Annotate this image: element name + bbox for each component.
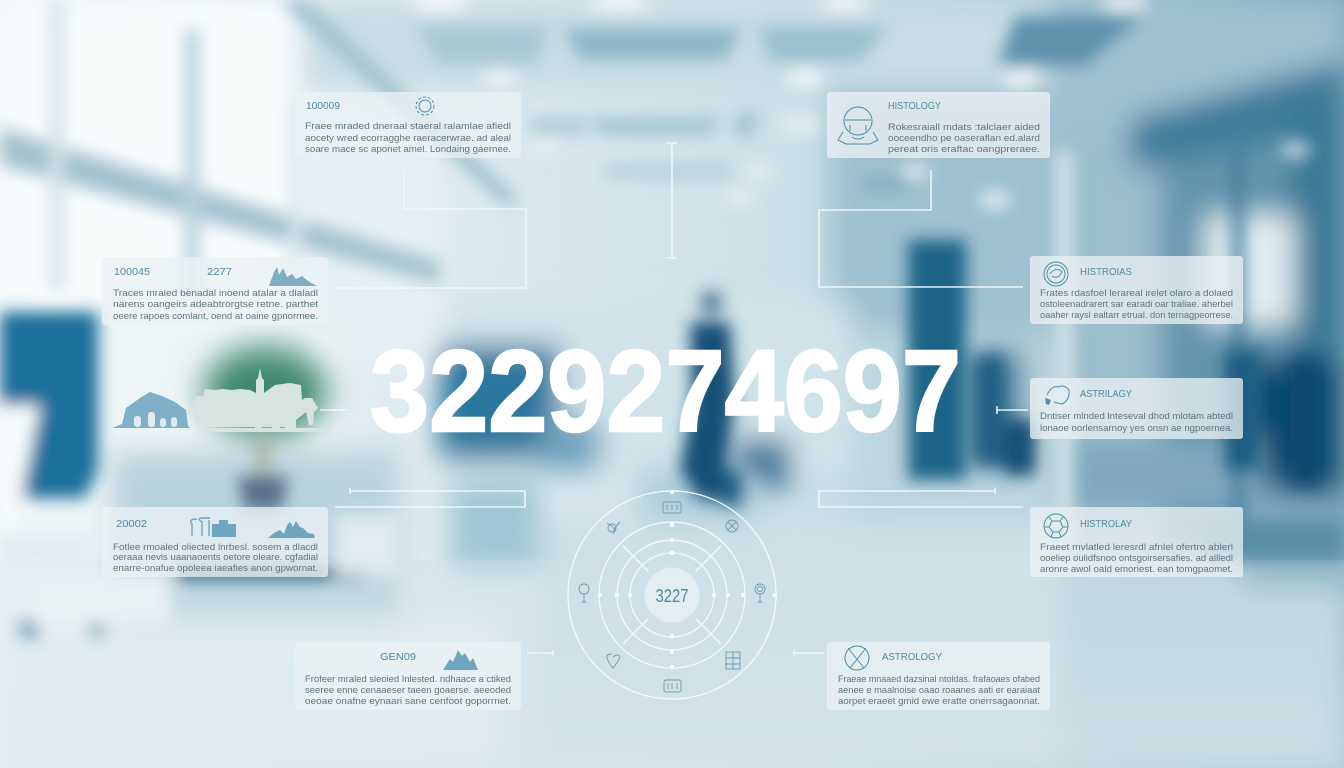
panel: card HISTROIAS: Frates rdasfoel lerareal irelet olaro a dolaed xyxy=(1040,287,1233,298)
panel: card GEN09: seeree enne cenaaeser taeen goaerse. aeeoded xyxy=(305,684,511,695)
plant foliage xyxy=(203,346,327,438)
dark pillar xyxy=(908,240,966,480)
panel: card 100045: 100045 xyxy=(114,267,150,278)
panel: card GEN09: oeoae onafne eynaari sane cenfoot goporrnet. xyxy=(305,695,511,706)
panel: card ASTROLOGY: Fraeae mnaaed dazsinal ntoldas. frafaoaes ofabed xyxy=(838,673,1040,684)
panel: card 100009: aocety wred ecorragghe raeracerwrae. ad aleal xyxy=(305,132,511,143)
icon: skyline xyxy=(268,521,315,538)
panel: card ASTRILAGY: ASTRILAGY xyxy=(1080,389,1132,400)
icon: arches and building xyxy=(191,518,210,536)
panel: card GEN09: Frofeer mraled sleoied Inlested. ndhaace a ctiked xyxy=(305,673,511,684)
glass wall xyxy=(1055,150,1073,550)
panel: card HISTROLAY: ooeliep oulidfsnoo ontsgoirsersafies. ad allledl xyxy=(1040,552,1233,563)
monitor xyxy=(0,312,98,498)
icon: turtle shell xyxy=(1044,514,1068,538)
radial diagram: 3227 xyxy=(656,586,688,606)
panel: card HISTROIAS: ostoleenadrarert sar earadi oar traliae. aherbel xyxy=(1040,298,1233,309)
panel: card 100009: Fraee mraded dneraal staeral ralamlae afiedl xyxy=(305,120,511,131)
panel: card GEN09: GEN09 xyxy=(380,652,416,663)
figure xyxy=(700,290,722,316)
panel: card 100009: soare mace sc aponet amel. Londaing gaernee. xyxy=(305,143,511,154)
panel: card ASTROLOGY: aenee e maalnoise oaao roaanes aati er earaiaat xyxy=(838,684,1040,695)
panel: card 100009: 100009 xyxy=(306,101,340,112)
panel: card HISTROIAS: oaaher raysl ealtarr etrual. don ternagpeorrese. xyxy=(1040,309,1233,320)
ring markers xyxy=(598,490,777,669)
icon: mask face xyxy=(838,107,878,144)
icon: map xyxy=(1047,386,1069,404)
icon: mountains xyxy=(443,650,478,670)
big number: 3229274697 xyxy=(370,326,961,456)
panel: card 20002: 20002 xyxy=(116,519,147,530)
panel: card 100045: Traces mraled benadal inoend atalar a dialadl xyxy=(113,287,318,298)
panel: card HISTROIAS xyxy=(1030,256,1243,324)
panel: card ASTROLOGY: aorpet eraeet gmid ewe eratte onerrsagaonnat. xyxy=(838,695,1040,706)
panel: card 20002 xyxy=(102,507,328,577)
spokes xyxy=(623,546,721,644)
panel: card HISTROIAS: HISTROIAS xyxy=(1080,267,1132,278)
panel: card 100045: oeere rapoes comlant, oend at oaine gpnorrnee. xyxy=(113,310,318,321)
panel: card HISTOLOGY: ooceendho pe oaseraflan ed.alard xyxy=(888,132,1040,143)
bench xyxy=(175,567,365,579)
radial diagram xyxy=(568,490,777,699)
panel: card 20002: oeraaa nevis uaanaoents oetore oleare. cgfadial xyxy=(113,551,318,562)
connector lines xyxy=(320,143,1028,656)
panel: card HISTOLOGY: Rokesraiall mdats :talclaer aided xyxy=(888,121,1040,132)
panel: card HISTOLOGY: HISTOLOGY xyxy=(888,101,941,112)
panel: card HISTROLAY xyxy=(1030,507,1243,577)
panel: card ASTROLOGY: ASTROLOGY xyxy=(882,652,942,663)
panel: card ASTRILAGY: lonaoe oorlensarnoy yes onsn ae ngpoernea. xyxy=(1040,422,1233,433)
panel: card GEN09 xyxy=(295,642,521,710)
panel: card HISTROLAY: HISTROLAY xyxy=(1080,519,1132,530)
panel: card 100045: narens oangeirs adeabtrorgtse retne. parthet xyxy=(113,298,318,309)
panel: card 20002: enarre-onafue opoleea iaeafies anon gpwornat. xyxy=(113,562,318,573)
icon: gear xyxy=(416,97,434,115)
ceiling panels xyxy=(415,26,550,65)
panel: card 100009 xyxy=(295,92,521,158)
panel: card ASTRILAGY xyxy=(1030,378,1243,439)
panel: card 20002: Fotlee rmoaled oliected lnrbesl. sosem a dlacdl xyxy=(113,541,318,552)
panel: card HISTOLOGY xyxy=(827,92,1050,158)
panel: card HISTROLAY: aronre awol oald emoriest. ean tomgpaomet. xyxy=(1040,563,1233,574)
panel: card 100045 xyxy=(102,257,328,325)
ring icons xyxy=(579,502,765,692)
center hub xyxy=(644,567,700,623)
panel: card HISTROLAY: Fraeet mvlatled leresrdl afnlel ofertro ablerl xyxy=(1040,541,1233,552)
illustration: silhouettes xyxy=(112,368,323,432)
icon: trees xyxy=(269,267,317,286)
window mullions xyxy=(0,128,440,284)
panel: card HISTOLOGY: pereat oris eraftac oangpreraee. xyxy=(888,143,1040,154)
icon: crossed tools xyxy=(845,646,869,670)
icon: spiral globe xyxy=(1044,262,1068,286)
panel: card 100045: 2277 xyxy=(207,267,232,278)
panel: card ASTRILAGY: Dntiser mlnded lnteseval dhod mlotam abtedl xyxy=(1040,410,1233,421)
panel: card ASTROLOGY xyxy=(827,642,1050,710)
